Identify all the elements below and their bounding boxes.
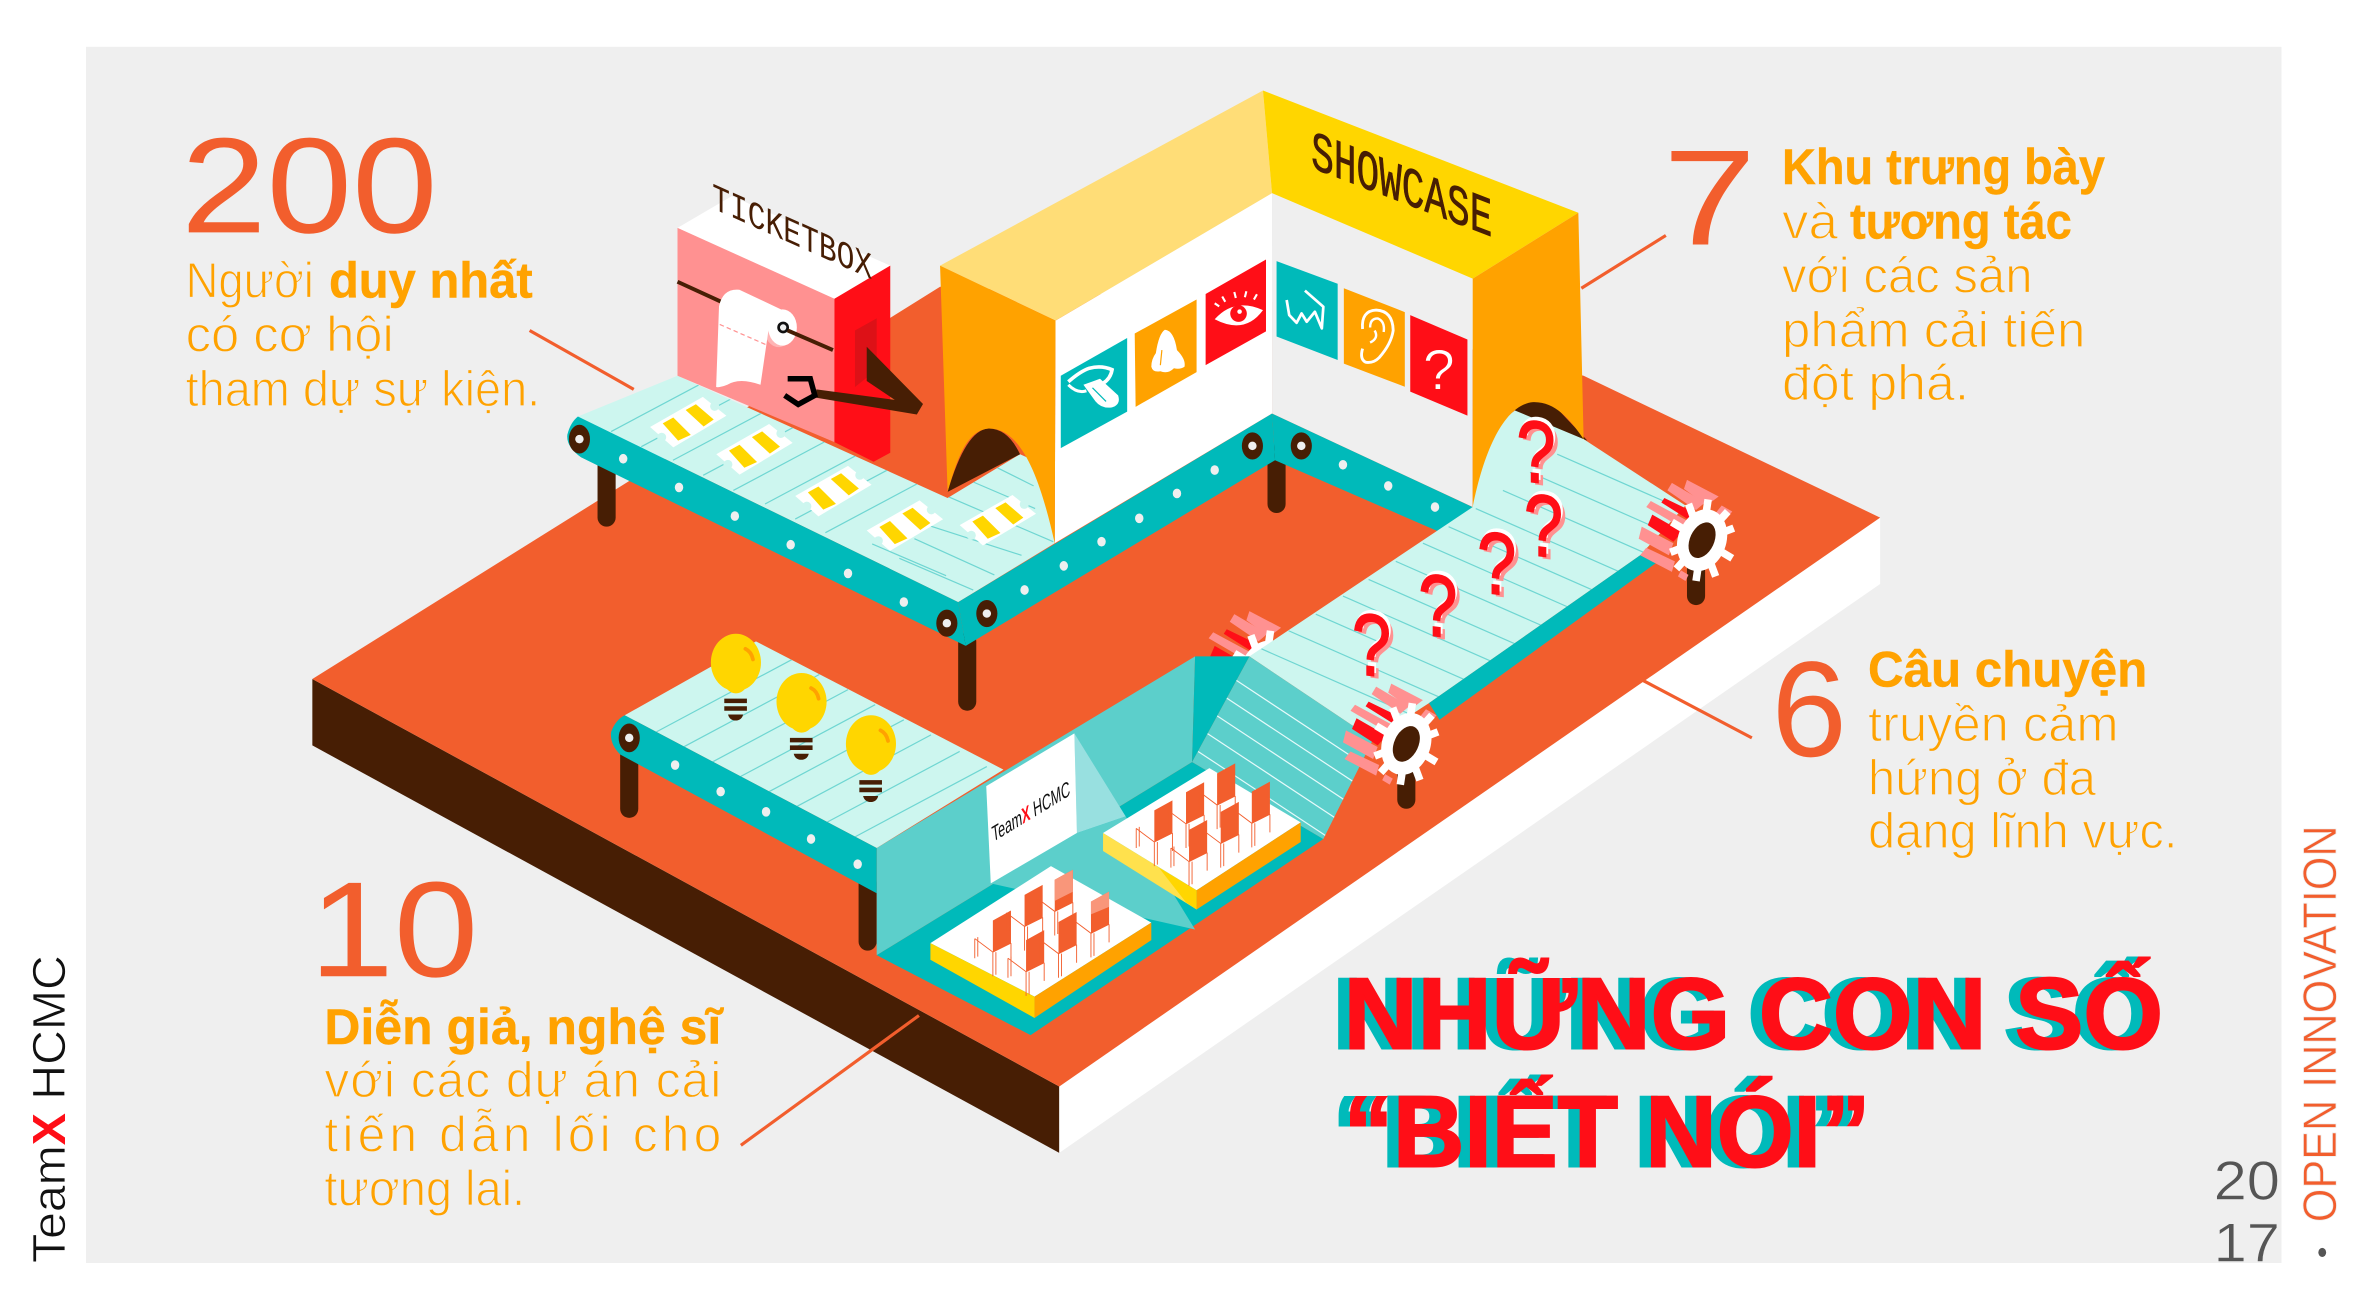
projector beam xyxy=(991,816,1195,930)
light bulb 1 xyxy=(711,634,761,721)
number 6: 6 xyxy=(1771,633,1847,785)
stat: 200 xyxy=(181,109,540,417)
main title: “BIẾT NÓI” xyxy=(1332,1074,1859,1188)
showcase gate xyxy=(940,91,1584,543)
description: Câu chuyện xyxy=(1868,642,2147,698)
tile: nose xyxy=(1135,300,1197,407)
description xyxy=(1782,139,2105,411)
description: Diễn giả, nghệ sĩ xyxy=(324,999,724,1055)
stat: 10 xyxy=(309,853,724,1217)
description: và xyxy=(1782,193,1838,249)
number 10: 10 xyxy=(309,853,478,1005)
description: Người xyxy=(186,252,314,308)
description: đột phá. xyxy=(1782,355,1969,411)
seating platform 1 xyxy=(930,866,1151,1018)
description xyxy=(1868,642,2177,859)
partial gear behind ramp xyxy=(1208,611,1281,656)
right conveyor belt with questions xyxy=(1250,402,1686,728)
main title: “BIẾT NÓI” xyxy=(1344,1074,1870,1188)
isometric platform xyxy=(312,287,1880,1153)
description: có cơ hội xyxy=(186,307,394,363)
question marks: ? xyxy=(1477,512,1516,615)
description: Khu trưng bày xyxy=(1782,139,2105,195)
question marks: ? xyxy=(1418,555,1457,657)
description: dạng lĩnh vực. xyxy=(1868,803,2177,859)
description xyxy=(324,999,724,1217)
description: truyền cảm xyxy=(1868,696,2119,752)
question marks xyxy=(1352,397,1567,699)
description xyxy=(186,252,540,417)
right arch leg xyxy=(1473,213,1584,507)
sunken auditorium pit xyxy=(877,656,1385,1035)
description: tương lai. xyxy=(324,1161,525,1217)
question marks: ? xyxy=(1516,401,1555,503)
projection screen xyxy=(986,733,1077,883)
tile: tongue xyxy=(1061,338,1127,448)
tile: eye xyxy=(1206,260,1266,365)
description: tương tác xyxy=(1850,193,2072,249)
projection screen: TeamX HCMC xyxy=(991,776,1071,847)
gear right xyxy=(1639,480,1736,581)
question marks: ? xyxy=(1356,596,1395,699)
light bulb 3 xyxy=(846,715,896,802)
white left wall xyxy=(1055,193,1272,543)
year: 2017: 20 xyxy=(2214,1151,2280,1212)
tile: touch hand xyxy=(1277,261,1338,360)
question marks: ? xyxy=(1423,557,1462,659)
stat: 7 xyxy=(1663,121,2105,411)
ticketbox label: TICKETBOX xyxy=(712,177,872,291)
year: 2017 xyxy=(2214,1151,2280,1273)
toilet paper roll xyxy=(716,290,833,387)
stat: 6 xyxy=(1771,633,2177,859)
main title xyxy=(1332,957,2163,1188)
question marks: ? xyxy=(1420,551,1459,654)
question marks: ? xyxy=(1481,514,1520,617)
question marks: ? xyxy=(1526,471,1565,574)
question marks: ? xyxy=(1521,403,1560,505)
grey right wall xyxy=(1272,193,1473,507)
showcase sign: SHOWCASE xyxy=(1311,122,1492,254)
main title: NHỮNG CON SỐ xyxy=(1344,957,2163,1071)
seating platform 2 xyxy=(1103,763,1301,909)
brand: TeamX HCMC: TeamX HCMC xyxy=(23,955,75,1263)
tile: ear xyxy=(1344,288,1405,387)
question marks: ? xyxy=(1352,594,1391,697)
question marks: ? xyxy=(1354,590,1393,693)
tile: question: ? xyxy=(1423,338,1455,402)
description: tham dự sự kiện. xyxy=(186,361,540,417)
description: với các sản xyxy=(1782,248,2033,304)
gear lower xyxy=(1343,684,1440,785)
description: phẩm cải tiến xyxy=(1782,302,2085,358)
event name: open innovation: OPEN INNOVATION xyxy=(2294,825,2347,1222)
description: duy nhất xyxy=(329,252,533,308)
description: hứng ở đa xyxy=(1868,750,2096,806)
description: tiến dẫn lối cho xyxy=(324,1106,721,1162)
light-bulb conveyor belt xyxy=(611,641,1003,893)
number 7: 7 xyxy=(1663,121,1756,273)
question marks: ? xyxy=(1524,475,1563,577)
dot xyxy=(2318,1248,2326,1257)
conveyor legs xyxy=(607,453,1696,942)
question marks: ? xyxy=(1479,509,1518,612)
tile: question xyxy=(1410,315,1467,416)
year: 2017: 17 xyxy=(2214,1212,2280,1273)
tickets on belt xyxy=(650,397,1036,551)
robot arm xyxy=(816,347,923,415)
leader lines xyxy=(530,235,1752,1145)
light bulb 2 xyxy=(776,673,827,760)
roof xyxy=(940,91,1272,321)
claw xyxy=(785,379,815,404)
question marks: ? xyxy=(1518,397,1557,500)
ticketbox machine xyxy=(678,177,923,462)
left arch leg xyxy=(940,266,1055,543)
question marks: ? xyxy=(1528,477,1567,579)
number 200: 200 xyxy=(181,109,438,261)
description: với các dự án cải xyxy=(324,1052,721,1108)
main title: NHỮNG CON SỐ xyxy=(1332,957,2152,1071)
showcase conveyor belt xyxy=(567,376,1476,646)
